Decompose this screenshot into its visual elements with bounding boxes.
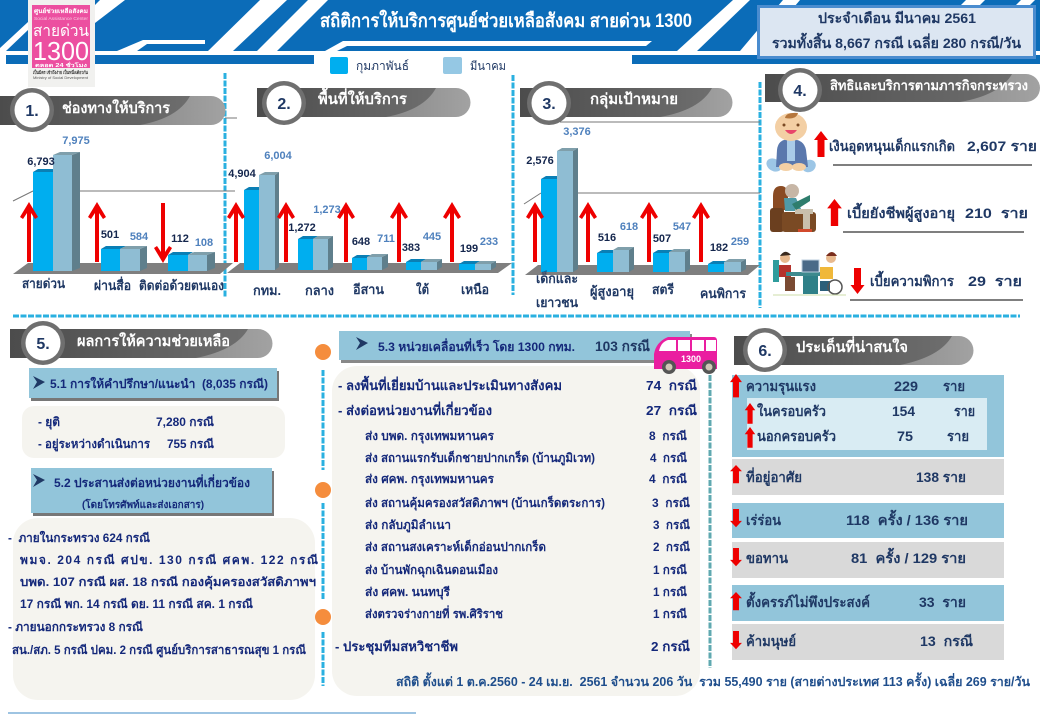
bar chart: target groups: 547 [673, 221, 691, 233]
legend: มีนาคม [470, 59, 506, 73]
bar chart: areas: 233 [480, 236, 498, 248]
legend [330, 57, 506, 74]
title: สถิติการให้บริการศูนย์ช่วยเหลือสังคม สายด่วน 1300 [320, 9, 692, 33]
card: mobile unit details: 4 กรณี [649, 472, 687, 486]
row: human trafficking: ค้ามนุษย์ [746, 633, 796, 650]
row: violence: 154 [892, 403, 915, 419]
panel: ministry rights and services [764, 68, 1040, 300]
row: homeless [730, 503, 1004, 538]
row: housing: ที่อยู่อาศัย [746, 467, 802, 486]
row: housing: 138 ราย [916, 469, 966, 485]
panel: target groups [520, 81, 760, 310]
card: mobile unit details: ส่ง บพด. กรุงเทพมหานคร [365, 429, 495, 444]
bar chart: channels: 584 [130, 231, 149, 243]
bar chart: channels: 7,975 [62, 135, 90, 147]
card: mobile unit details: 4 กรณี [650, 451, 687, 465]
bar chart: channels: 112 [171, 233, 189, 245]
bar chart: target groups: 516 [598, 232, 616, 244]
row: unwanted pregnancy: 33 ราย [919, 594, 966, 610]
service row: child support [829, 137, 1037, 165]
bar chart: areas: 1,273 [313, 204, 341, 216]
card: counselling outcomes: 755 กรณี [167, 437, 214, 451]
heading 2: 2. [277, 96, 291, 113]
service row: elderly allowance [843, 202, 1028, 232]
card: coordination details: บพด. 107 กรณี ผส. 18 กรณี กองคุ้มครองสวัสดิภาพฯ [20, 575, 316, 590]
row: unwanted pregnancy [730, 585, 1004, 621]
bar chart: areas: 1,272 [288, 222, 316, 234]
header banner [0, 0, 1040, 64]
card: mobile unit details: ส่ง ศคพ. นนทบุรี [365, 585, 451, 600]
card: mobile unit details: ส่ง กลับภูมิลำเนา [365, 518, 451, 533]
panel: issues of interest [730, 328, 1004, 660]
row: violence: ความรุนแรง [746, 378, 816, 395]
bar chart: channels: 6,793 [27, 156, 55, 168]
row: begging: 81 ครั้ง / 129 ราย [851, 547, 966, 566]
legend: กุมภาพันธ์ [356, 59, 409, 74]
card: mobile unit details: 3 กรณี [652, 496, 690, 510]
icon: baby [764, 113, 818, 175]
service row: disability allowance [850, 270, 1023, 300]
bar chart: areas: 711 [377, 233, 395, 245]
heading 6: 6. [758, 343, 772, 360]
heading 5: 5. [36, 336, 50, 353]
card: counselling outcomes: 7,280 กรณี [156, 415, 214, 429]
service row: elderly allowance: 210 ราย [965, 205, 1028, 221]
card: coordination details: - ภายในกระทรวง 624 กรณี [8, 530, 150, 545]
icon: orange timeline dots [315, 344, 331, 625]
row: violence: ในครอบครัว [757, 402, 826, 419]
card: mobile unit details: ส่ง สถานแรกรับเด็กชายปากเกร็ด (บ้านภูมิเวท) [365, 450, 595, 466]
panel: 5.3 mobile unit [332, 331, 717, 696]
bar chart: areas: 383 [402, 242, 420, 254]
icon: elderly reading [770, 184, 816, 232]
row: housing [730, 459, 1004, 495]
row: human trafficking: 13 กรณี [920, 633, 973, 649]
row: violence: 75 [897, 428, 913, 444]
heading 5: ผลการให้ความช่วยเหลือ [77, 332, 230, 350]
bar chart: target groups: 3,376 [563, 126, 591, 138]
bar chart: areas: กทม. [253, 283, 281, 298]
bar chart: target groups: ผู้สูงอายุ [590, 284, 634, 300]
bar chart: channels: 501 [101, 229, 119, 241]
bar chart: target groups: 618 [620, 221, 638, 233]
card: mobile unit details: - ลงพื้นที่เยี่ยมบ้านและประเมินทางสังคม [338, 375, 562, 393]
footer statistics note: สถิติ ตั้งแต่ 1 ต.ค.2560 - 24 เม.ย. 2561 จำนวน 206 วัน รวม 55,490 ราย (สายต่างประเทศ 113 ครั้ง) เฉลี่ย 269 ราย/วัน [396, 672, 1030, 689]
heading 4: สิทธิและบริการตามภารกิจกระทรวง [830, 78, 1028, 93]
card: mobile unit details: 1 กรณี [653, 563, 687, 577]
callout: monthly total [758, 6, 1034, 58]
card: mobile unit details: 2 กรณี [653, 540, 690, 554]
card: counselling outcomes [22, 406, 285, 458]
heading 4 [765, 68, 1040, 112]
row: violence: ราย [954, 403, 975, 419]
bar chart: areas: ใต้ [416, 281, 429, 297]
card: mobile unit details: - ประชุมทีมสหวิชาชีพ [335, 639, 458, 655]
bar chart: areas: อีสาน [353, 282, 384, 297]
box: 5.3 mobile unit heading: 103 กรณี [595, 338, 650, 354]
icon: disability service [773, 252, 846, 295]
bar chart: areas: กลาง [305, 283, 334, 298]
bar chart: areas: 199 [460, 243, 478, 255]
logo: hotline 1300: เป็นมิตร เข้าถึงง่าย เป็นหนึ่งเดียวกัน [33, 68, 89, 75]
bar chart: target groups: เยาวชน [536, 295, 578, 310]
bar chart: areas: 445 [423, 231, 441, 243]
row: homeless: เร่ร่อน [746, 512, 781, 528]
bar chart: areas: 648 [352, 236, 370, 248]
box: 5.3 mobile unit heading [339, 331, 692, 363]
panel: service channels [0, 88, 237, 293]
logo: hotline 1300 [28, 0, 95, 87]
row: homeless: 118 ครั้ง / 136 ราย [846, 509, 968, 528]
icon: pink 1300 van [654, 337, 717, 374]
card: mobile unit details: 1 กรณี [653, 607, 687, 621]
heading 6: ประเด็นที่น่าสนใจ [796, 336, 908, 356]
logo: hotline 1300: ตลอด 24 ชั่วโมง [35, 61, 88, 69]
callout: monthly total: ประจำเดือน มีนาคม 2561 [818, 10, 976, 26]
logo: hotline 1300: 1300 [33, 36, 89, 66]
bar chart: target groups: เด็กและ [536, 269, 578, 286]
heading 2: พื้นที่ให้บริการ [318, 87, 408, 108]
bar chart: areas: เหนือ [461, 282, 489, 297]
card: counselling outcomes: - ยุติ [38, 415, 60, 430]
box: 5.2 coordination [31, 468, 274, 516]
row: violence: ราย [947, 428, 969, 444]
heading 1 [0, 88, 226, 132]
row: begging [730, 542, 1004, 578]
card: mobile unit details: ส่ง บ้านพักฉุกเฉินดอนเมือง [365, 563, 498, 578]
card: mobile unit details: ส่ง สถานสงเคราะห์เด็กอ่อนปากเกร็ด [365, 539, 546, 554]
bar chart: target groups: 259 [731, 236, 749, 248]
heading 6 [734, 328, 974, 372]
card: mobile unit details [332, 366, 700, 696]
box: 5.2 coordination: (โดยโทรศัพท์และส่งเอกสาร) [82, 498, 204, 511]
heading 1: ช่องทางให้บริการ [62, 99, 171, 117]
service row: disability allowance: 29 ราย [968, 273, 1022, 289]
row: violence: 229 [894, 378, 918, 394]
row: violence: นอกครอบครัว [757, 428, 836, 444]
row: violence [730, 374, 1004, 457]
card: mobile unit details: 8 กรณี [649, 429, 687, 443]
bar chart: areas: 4,904 [228, 168, 257, 180]
bar chart: target groups: สตรี [652, 282, 674, 297]
box: 5.3 mobile unit heading: 5.3 หน่วยเคลื่อนที่เร็ว โดย 1300 กทม. [378, 338, 575, 354]
bar chart: channels: ผ่านสื่อ [94, 276, 131, 293]
card: coordination details: - ภายนอกกระทรวง 8 กรณี [8, 620, 143, 634]
bar chart: target groups: 507 [653, 233, 671, 245]
heading 3 [520, 81, 732, 125]
icon: pink 1300 van: 1300 [681, 354, 701, 364]
bar chart: areas [227, 150, 512, 298]
callout: monthly total: รวมทั้งสิ้น 8,667 กรณี เฉลี่ย 280 กรณี/วัน [772, 32, 1021, 51]
bar chart: target groups: 182 [710, 242, 728, 254]
logo: hotline 1300: สายด่วน [33, 23, 89, 40]
card: mobile unit details: - ส่งต่อหน่วยงานที่เกี่ยวข้อง [338, 401, 492, 418]
service row: child support: เงินอุดหนุนเด็กแรกเกิด [829, 137, 955, 155]
service row: disability allowance: เบี้ยความพิการ [870, 270, 954, 289]
card: mobile unit details: 3 กรณี [653, 518, 690, 532]
heading 4: 4. [793, 83, 807, 100]
card: mobile unit details: 2 กรณี [651, 639, 690, 654]
card: mobile unit details: ส่ง สถานคุ้มครองสวัสดิภาพฯ (บ้านเกร็ดตระการ) [365, 495, 605, 511]
logo: hotline 1300: ศูนย์ช่วยเหลือสังคม [34, 7, 88, 16]
card: mobile unit details: ส่ง ศคพ. กรุงเทพมหานคร [365, 472, 495, 487]
card: coordination details [8, 518, 318, 700]
heading 3: 3. [542, 96, 556, 113]
heading 3: กลุ่มเป้าหมาย [590, 91, 678, 109]
bar chart: target groups [525, 126, 760, 310]
row: unwanted pregnancy: ตั้งครรภ์ไม่พึงประสงค์ [746, 591, 870, 610]
card: mobile unit details: ส่งตรวจร่างกายที่ รพ.ศิริราช [365, 605, 503, 621]
row: human trafficking [730, 624, 1004, 660]
row: violence: ราย [943, 378, 965, 394]
logo: hotline 1300: Ministry of Social Development [33, 76, 88, 80]
bar chart: target groups: คนพิการ [700, 286, 746, 301]
box: 5.2 coordination: 5.2 ประสานส่งต่อหน่วยงานที่เกี่ยวข้อง [54, 474, 250, 490]
logo: hotline 1300: Social Assistance Center [34, 16, 89, 21]
bar chart: target groups: 2,576 [526, 155, 554, 167]
panel: service areas [227, 81, 512, 298]
bar chart: channels [13, 135, 233, 293]
heading 1: 1. [25, 103, 39, 120]
box: 5.1 counselling [29, 368, 279, 401]
bar chart: channels: สายด่วน [22, 276, 65, 291]
panel: assistance results [8, 321, 318, 700]
card: mobile unit details: 74 กรณี [646, 378, 697, 393]
card: mobile unit details: 1 กรณี [653, 585, 687, 599]
box: 5.1 counselling: 5.1 การให้คำปรึกษา/แนะนำ (8,035 กรณี) [50, 376, 268, 391]
heading 5 [10, 321, 272, 365]
bar chart: areas: 6,004 [264, 150, 293, 162]
card: coordination details: พมจ. 204 กรณี ศปข. 130 กรณี ศคพ. 122 กรณี [20, 553, 318, 567]
heading 2 [257, 81, 470, 125]
row: begging: ขอทาน [746, 550, 788, 566]
card: coordination details: 17 กรณี พก. 14 กรณี ดย. 11 กรณี สค. 1 กรณี [20, 597, 253, 611]
card: coordination details: สน./สภ. 5 กรณี ปคม. 2 กรณี ศูนย์บริการสาธารณสุข 1 กรณี [12, 643, 306, 658]
service row: child support: 2,607 ราย [967, 138, 1037, 154]
bar chart: channels: 108 [195, 237, 213, 249]
card: mobile unit details: 27 กรณี [646, 403, 697, 418]
service row: elderly allowance: เบี้ยยังชีพผู้สูงอายุ [847, 202, 955, 222]
bar chart: channels: ติดต่อด้วยตนเอง [139, 278, 224, 293]
card: counselling outcomes: - อยู่ระหว่างดำเนินการ [38, 437, 151, 452]
